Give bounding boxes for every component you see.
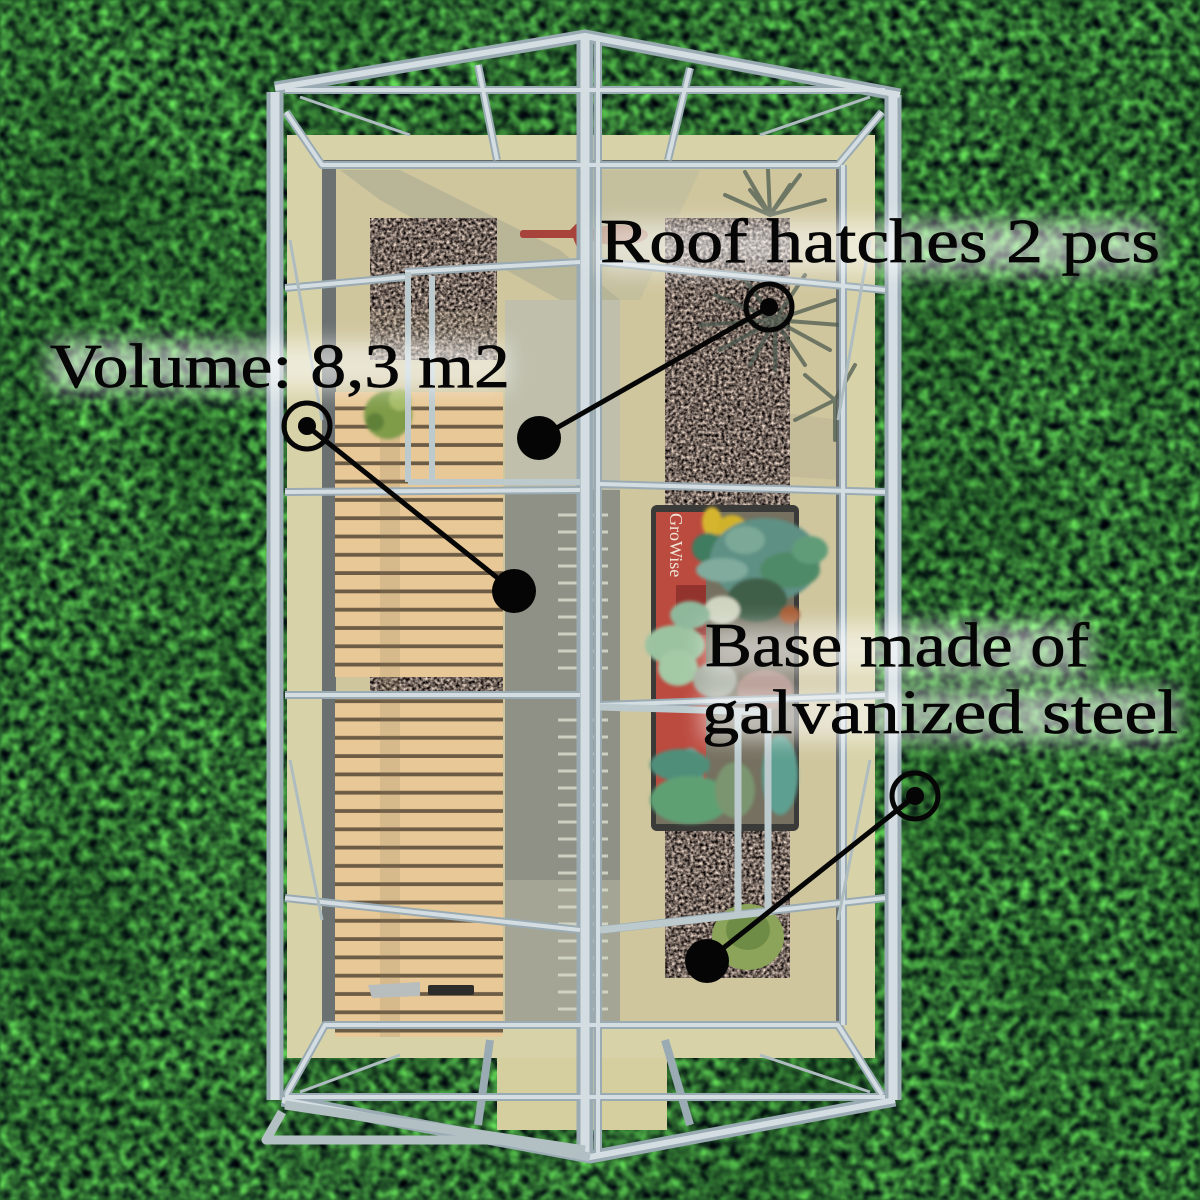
roof hatch left: [408, 272, 580, 482]
spiky plants: [700, 170, 855, 440]
planter with red growbag: [651, 505, 799, 831]
callout: base material: [685, 612, 1178, 983]
greenhouse floor and base: [287, 135, 875, 1130]
roof hatch right: [600, 707, 768, 930]
red watering can: [520, 222, 648, 250]
small plant on bench: [364, 389, 412, 439]
greenhouse aluminium frame: [275, 36, 900, 1157]
green bucket: [712, 904, 784, 970]
callout: base material: galvanized steel: [702, 679, 1178, 747]
callout: roof hatches: Roof hatches 2 pcs: [600, 208, 1160, 276]
callout: base material: Base made of: [705, 612, 1089, 680]
planter with red growbag: GroWise: [666, 513, 686, 577]
callout: volume: [50, 333, 536, 613]
wooden staging benches: [335, 392, 503, 1037]
path centre markings: [558, 515, 608, 1009]
gravel beds: [370, 218, 790, 978]
callout: volume: Volume: 8,3 m2: [50, 333, 510, 401]
door at front: [266, 1105, 590, 1157]
plants in planter: [645, 507, 828, 824]
callout: roof hatches: [517, 208, 1160, 460]
